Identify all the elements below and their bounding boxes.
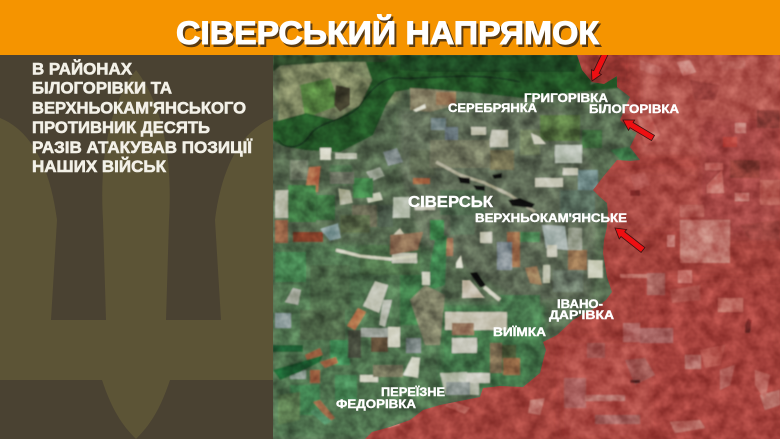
- map labels: settlements: ГРИГОРІВКА: [524, 91, 608, 105]
- map terrain fields: [273, 55, 638, 439]
- map labels: settlements: ДАР'ІВКА: [549, 308, 614, 322]
- panel: satellite map: [273, 55, 640, 439]
- text block: summary: ПРОТИВНИК ДЕСЯТЬ: [32, 118, 210, 137]
- map labels: settlements: БІЛОГОРІВКА: [589, 102, 679, 116]
- text block: summary: РАЗІВ АТАКУВАВ ПОЗИЦІЇ: [32, 138, 253, 157]
- panel: occupied red zone: [365, 55, 780, 439]
- map labels: settlements: СЕРЕБРЯНКА: [448, 101, 537, 115]
- map labels: settlements: [336, 91, 679, 411]
- map labels: settlements: ВИЇМКА: [493, 324, 546, 339]
- left panel background: [0, 55, 273, 439]
- text block: summary: ВЕРХНЬОКАМ'ЯНСЬКОГО: [32, 98, 246, 118]
- map labels: settlements: ВЕРХНЬОКАМ'ЯНСЬКЕ: [475, 211, 627, 225]
- header bar: [0, 0, 780, 55]
- map labels: settlements: ФЕДОРІВКА: [336, 397, 416, 411]
- map labels: settlements: ПЕРЕЇЗНЕ: [381, 384, 445, 399]
- icon: attack arrow Bilohorivka: [623, 120, 654, 141]
- title: СІВЕРСЬКИЙ НАПРЯМОК: [176, 15, 599, 51]
- text block: summary: [32, 60, 253, 176]
- text block: summary: В РАЙОНАХ: [32, 60, 133, 78]
- title: СІВЕРСЬКИЙ НАПРЯМОК: [178, 18, 601, 54]
- map labels: settlements: СІВЕРСЬК: [408, 194, 494, 211]
- text block: summary: БІЛОГОРІВКИ ТА: [32, 78, 172, 98]
- icon: attack arrow north: [591, 51, 609, 81]
- trident emblem: [0, 70, 273, 439]
- map labels: settlements: ІВАНО-: [557, 297, 603, 311]
- icon: attack arrow Verkhnokamianske: [615, 228, 645, 252]
- red zone texture: [385, 55, 780, 439]
- text block: summary: НАШИХ ВІЙСЬК: [32, 157, 167, 176]
- map texture overlay: [273, 55, 780, 439]
